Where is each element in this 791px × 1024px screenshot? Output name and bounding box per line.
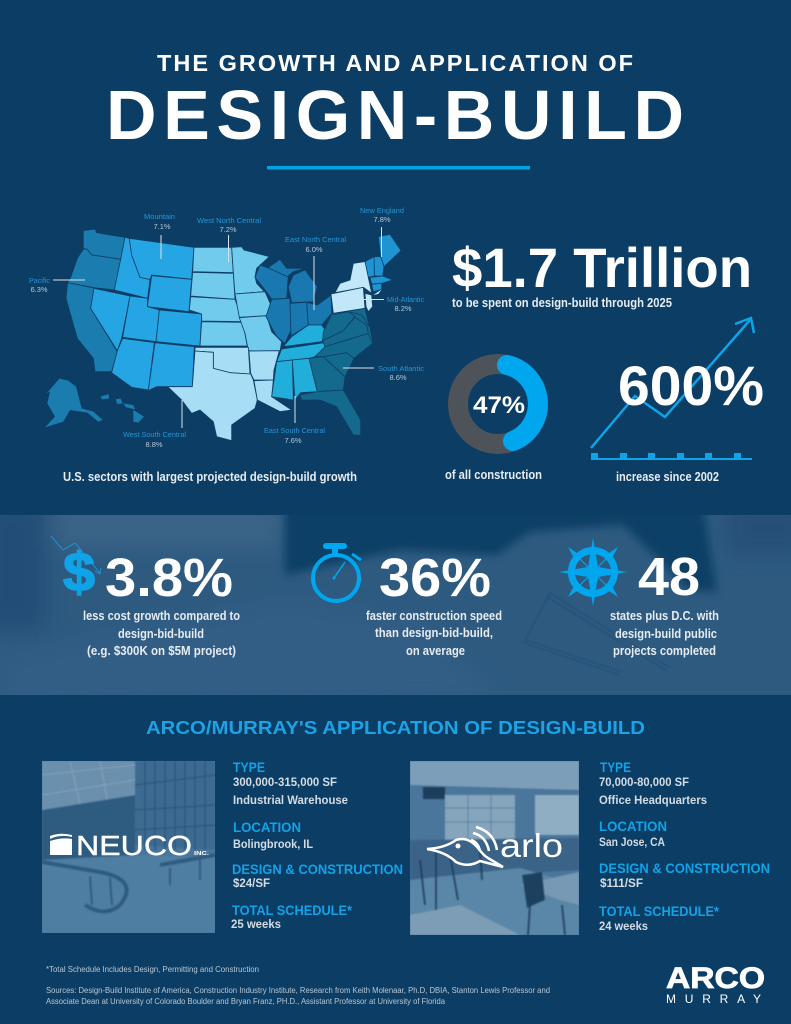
region: West North Central: [189, 247, 282, 352]
panel: Arlo facts: LOCATION: [599, 818, 667, 834]
region: East South Central: [272, 325, 332, 400]
map labels: South Atlantic: [378, 364, 424, 373]
stat: $1.7 Trillion: to be spent on design-build through 2025: [452, 296, 672, 310]
stat: 48 states: 48: [638, 547, 700, 607]
panel: Neuco facts: DESIGN & CONSTRUCTION: [232, 861, 403, 877]
logo: Arco Murray: [666, 962, 765, 1006]
map caption: U.S. sectors with largest projected design-build growth: [63, 470, 357, 484]
stat: 3.8% cost growth: design-bid-build: [118, 627, 204, 641]
icon: dollar with falling arrow: [51, 536, 101, 603]
panel: Arlo facts: DESIGN & CONSTRUCTION: [599, 860, 770, 876]
stat: 36% construction speed: than design-bid-build,: [375, 626, 493, 640]
stat: 36% construction speed: faster construction speed: [366, 609, 502, 623]
stat: 3.8% cost growth: [51, 536, 240, 658]
title: THE GROWTH AND APPLICATION OF: [157, 50, 633, 76]
donut chart: 47%: of all construction: [445, 468, 542, 482]
panel: Neuco facts: TYPE: [233, 759, 265, 775]
map labels: 8.8%: [145, 440, 163, 449]
map labels: [29, 206, 424, 449]
dark background with paper edge: [285, 505, 717, 592]
title underline: [267, 166, 530, 170]
panel: Neuco photo: [42, 761, 215, 933]
panel: Arlo facts: [599, 759, 770, 933]
panel: Arlo facts: Office Headquarters: [599, 793, 707, 807]
region: Mid-Atlantic: [331, 262, 382, 313]
stat: 36% construction speed: 36%: [379, 548, 491, 608]
map labels: East North Central: [285, 235, 346, 244]
panel: Arlo facts: $111/SF: [600, 876, 643, 890]
logo: Neuco: [50, 834, 208, 856]
panel: Neuco facts: LOCATION: [233, 819, 301, 835]
logo: Arco Murray: MURRAY: [666, 992, 761, 1006]
logo: Neuco: NEUCO: [76, 830, 192, 861]
donut chart: 47%: 47%: [473, 392, 525, 419]
sources: Sources: Design-Build Institute of America, Construction Industry Institute, Research from Keith Molenaar, Ph.D, DBIA, Stanton Lewis Professor and: [46, 986, 550, 995]
donut chart: 47%: [445, 364, 542, 482]
line chart: 600%: increase since 2002: [616, 470, 719, 484]
panel: Arlo facts: TYPE: [600, 759, 631, 775]
region: South Atlantic: [300, 308, 373, 435]
region: West South Central: [168, 347, 292, 441]
panel: Neuco facts: $24/SF: [233, 876, 270, 890]
stat: 48 states: design-build public: [615, 627, 717, 641]
panel: Arlo photo: [410, 761, 579, 935]
logo: Neuco: INC.: [194, 851, 210, 857]
stat: 48 states: [559, 538, 719, 658]
logo: Arco Murray: ARCO: [666, 962, 765, 995]
panel: Neuco facts: Industrial Warehouse: [233, 793, 348, 807]
map labels: Pacific: [29, 276, 50, 285]
icon: dollar with falling arrow: $: [63, 541, 95, 603]
icon: stopwatch: [313, 543, 361, 601]
stat: 3.8% cost growth: (e.g. $300K on $5M project): [87, 644, 236, 658]
panel: blueprint photo band: [0, 515, 791, 695]
region: East North Central: [255, 259, 332, 343]
title: DESIGN-BUILD: [106, 76, 684, 154]
region: New England: [365, 234, 401, 292]
map labels: East South Central: [264, 426, 325, 435]
panel: Arlo facts: TOTAL SCHEDULE*: [599, 903, 719, 919]
region: Pacific: [45, 229, 144, 427]
map labels: West South Central: [123, 430, 186, 439]
panel: Neuco facts: 300,000-315,000 SF: [233, 775, 337, 789]
panel: Neuco facts: TOTAL SCHEDULE*: [232, 902, 352, 918]
stat: 48 states: states plus D.C. with: [610, 609, 719, 623]
logo: Arlo: [427, 827, 563, 867]
stat: 3.8% cost growth: 3.8%: [105, 548, 233, 608]
map labels: 7.1%: [153, 222, 171, 231]
footnote: *Total Schedule Includes Design, Permitting and Construction: [46, 965, 259, 974]
stat: 36% construction speed: [313, 543, 502, 658]
panel: Arlo facts: 70,000-80,000 SF: [599, 775, 689, 789]
stat: 3.8% cost growth: less cost growth compared to: [83, 609, 240, 623]
map labels: West North Central: [197, 216, 261, 225]
map labels: 7.6%: [284, 436, 302, 445]
stat: $1.7 Trillion: $1.7 Trillion: [452, 236, 752, 299]
map labels: Mountain: [144, 212, 175, 221]
sources: [46, 986, 550, 1006]
line chart: 600%: [591, 318, 764, 484]
panel: Neuco facts: Bolingbrook, IL: [233, 837, 313, 851]
panel: Neuco facts: 25 weeks: [231, 917, 281, 931]
map labels: 7.8%: [373, 215, 391, 224]
sources: Associate Dean at University of Colorado Boulder and Bryan Franz, PH.D., Assistant Professor at University of Florida: [46, 997, 446, 1006]
logo: Arlo: arlo: [500, 827, 563, 864]
map labels: 8.6%: [389, 373, 407, 382]
region: Mountain: [91, 237, 202, 391]
map labels: 8.2%: [394, 304, 412, 313]
map labels: New England: [360, 206, 404, 215]
map labels: 6.3%: [30, 285, 48, 294]
line chart: 600%: 600%: [618, 354, 764, 417]
panel: Arlo facts: San Jose, CA: [599, 835, 665, 849]
map labels: 6.0%: [305, 245, 323, 254]
panel: Arlo facts: 24 weeks: [599, 919, 648, 933]
icon: compass: [559, 538, 627, 606]
panel: Neuco facts: [231, 759, 403, 931]
map labels: Mid-Atlantic: [387, 295, 424, 304]
stat: 36% construction speed: on average: [406, 644, 465, 658]
map: U.S. sectors: [29, 206, 424, 449]
map labels: 7.2%: [219, 225, 237, 234]
section heading: ARCO/MURRAY'S APPLICATION OF DESIGN-BUILD: [146, 717, 645, 738]
stat: 48 states: projects completed: [613, 644, 716, 658]
